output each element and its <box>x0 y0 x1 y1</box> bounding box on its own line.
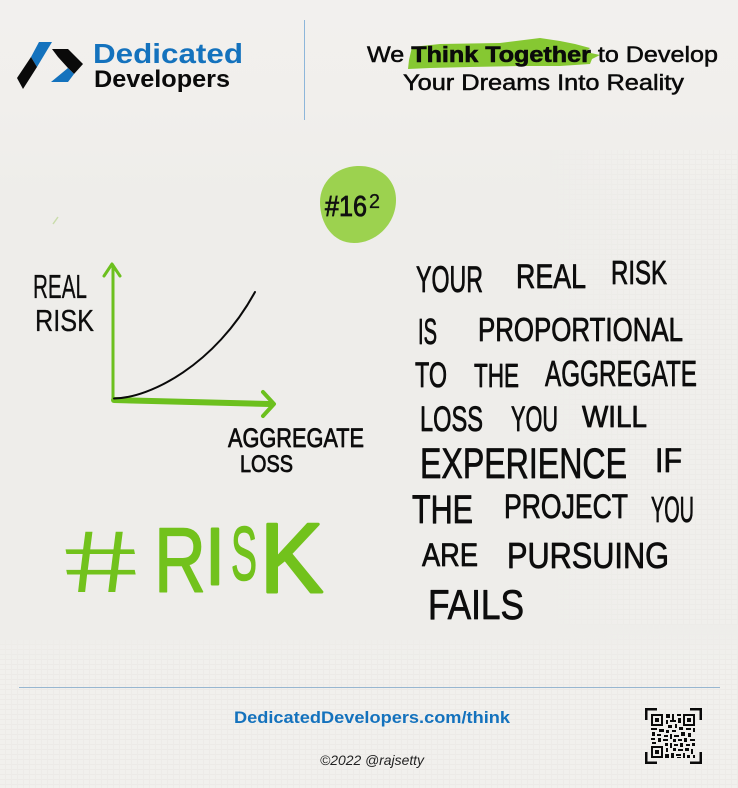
badge: #162: #16 <box>325 191 367 223</box>
handwritten statement: FAILS <box>428 581 524 628</box>
logo wordmark <box>93 38 243 93</box>
logo: Dedicated Developers <box>17 38 243 93</box>
badge: #162: 2 <box>369 191 380 213</box>
logo wordmark: Developers <box>94 66 230 93</box>
handwritten statement: YOUR <box>416 259 483 300</box>
x axis arrow <box>114 400 270 404</box>
handwritten statement: LOSS <box>420 400 483 439</box>
icon: QR code <box>645 708 702 764</box>
x axis label <box>228 423 364 478</box>
footer url: DedicatedDevelopers.com/think <box>234 708 511 727</box>
footer divider <box>19 687 720 688</box>
hashtag: #RISK <box>55 503 323 613</box>
handwritten statement <box>412 254 697 628</box>
logo wordmark: Dedicated <box>93 38 243 69</box>
handwritten statement: REAL <box>516 258 586 296</box>
handwritten statement: RISK <box>611 254 667 291</box>
handwritten statement: EXPERIENCE <box>420 440 627 488</box>
handwritten statement: THE <box>412 488 473 532</box>
handwritten statement: PROJECT <box>504 488 628 526</box>
y axis arrow <box>104 264 120 401</box>
curve <box>114 292 255 398</box>
hashtag: #RISK: R <box>154 510 206 612</box>
handwritten statement: YOU <box>511 400 558 439</box>
header divider <box>304 20 305 120</box>
handwritten statement: PURSUING <box>507 535 669 576</box>
y axis label: RISK <box>35 303 94 338</box>
copyright: ©2022 @rajsetty <box>320 752 425 768</box>
handwritten statement: WILL <box>582 399 647 434</box>
x axis label: LOSS <box>240 451 293 478</box>
chart: real risk vs aggregate loss <box>33 264 364 478</box>
tagline <box>367 38 718 95</box>
icon: logo mark <box>17 42 83 89</box>
hashtag: #RISK: S <box>231 512 257 597</box>
handwritten statement: PROPORTIONAL <box>478 311 683 348</box>
tagline: Your Dreams Into Reality <box>403 70 684 95</box>
handwritten statement: TO <box>415 356 447 395</box>
y axis label <box>33 268 94 338</box>
handwritten statement: THE <box>474 357 519 394</box>
hashtag: #RISK: K <box>260 503 323 613</box>
x axis label: AGGREGATE <box>228 423 364 453</box>
tagline: We Think Together to Develop <box>367 42 718 67</box>
hashtag: #RISK: I <box>206 512 224 601</box>
handwritten statement: ARE <box>422 537 478 573</box>
y axis label: REAL <box>33 268 87 305</box>
handwritten statement: IF <box>655 442 682 480</box>
hashtag: #RISK: # <box>55 513 147 611</box>
handwritten statement: IS <box>418 311 437 352</box>
brush highlight <box>408 38 600 69</box>
badge: #162 <box>320 166 396 243</box>
handwritten statement: YOU <box>651 489 694 530</box>
stray green tick <box>53 217 58 224</box>
